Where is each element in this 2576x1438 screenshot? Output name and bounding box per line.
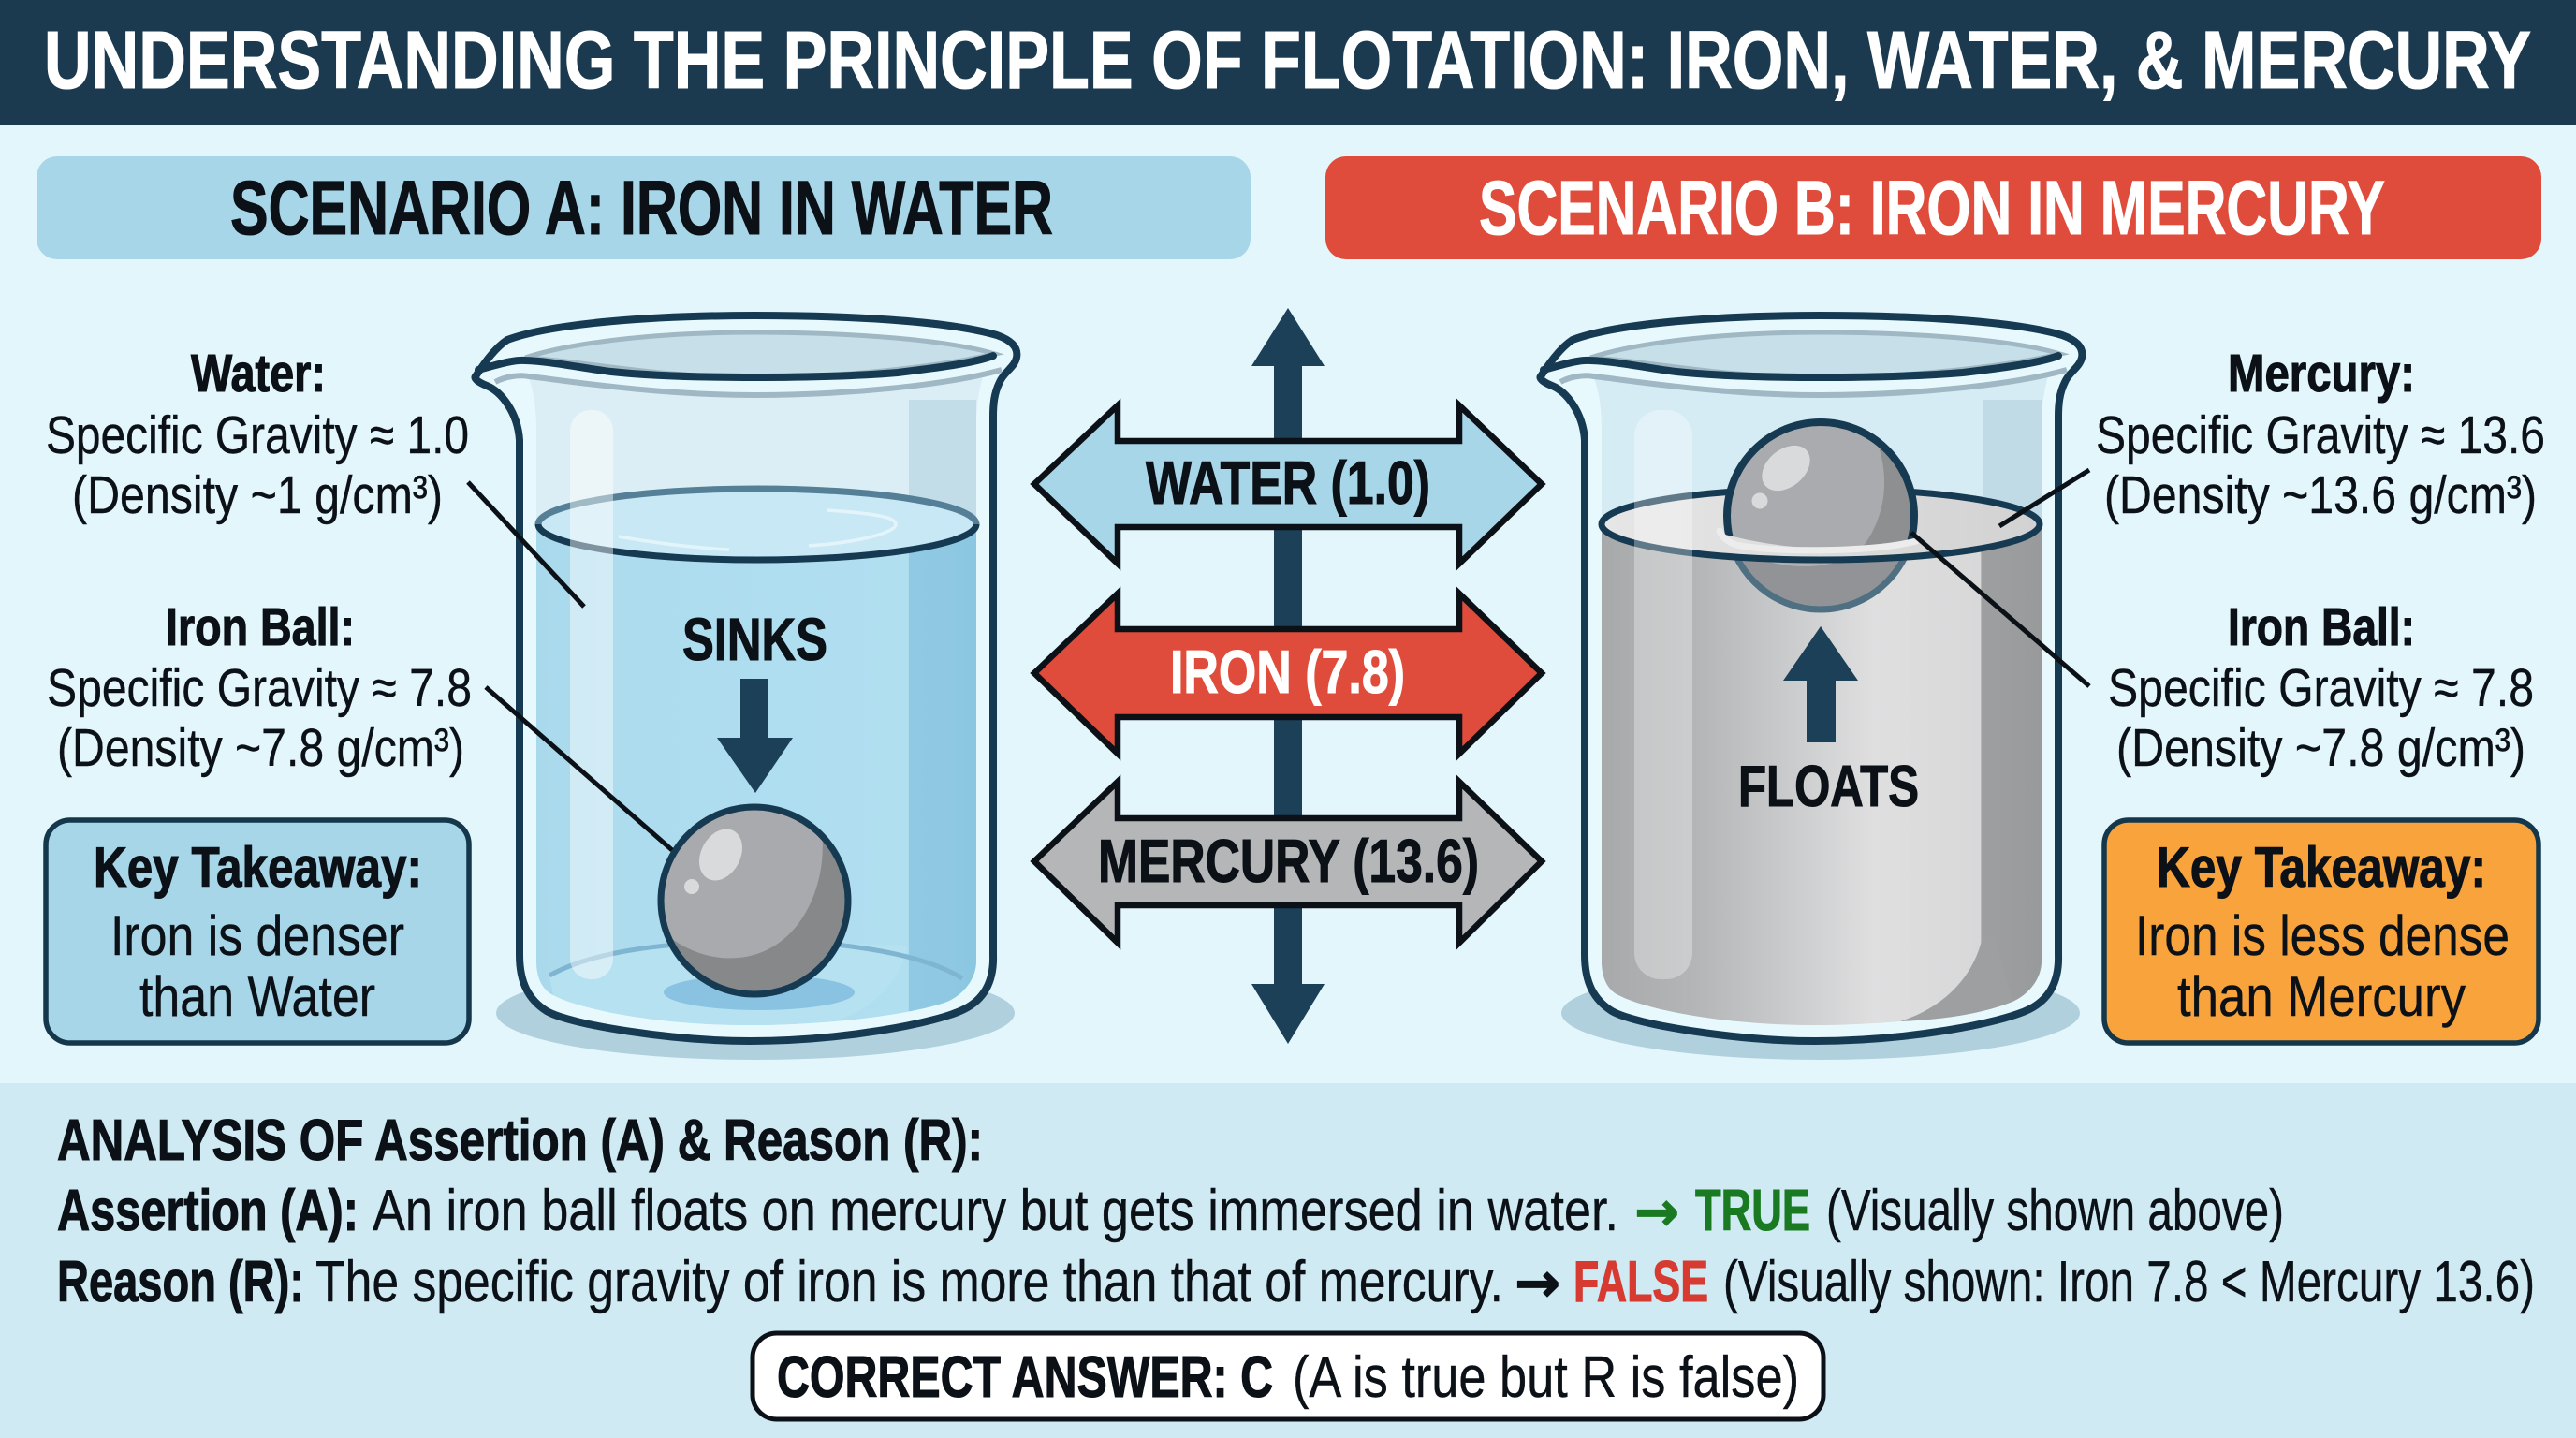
label: FLOATS: FLOATS [1738,755,1919,819]
callout: key takeaway A: than Water [139,965,375,1028]
glass highlight [570,410,613,979]
assertion line: (Visually shown above) [1826,1179,2284,1243]
callout: key takeaway B [2104,820,2539,1043]
correct answer box [753,1333,1823,1419]
iron ball [661,807,848,994]
mercury body [1602,524,2042,1025]
water surface [538,489,976,560]
text block: water properties: Water: [191,344,326,404]
glass body [476,315,1017,1041]
text block: iron ball properties A: Iron Ball: [166,597,355,657]
double arrow: water: WATER (1.0) [1146,448,1430,517]
meniscus [1720,531,1916,550]
arrow: up [1783,626,1858,742]
callout: key takeaway B: Iron is less dense [2135,904,2510,967]
beaker shadow [1561,966,2080,1060]
assertion line: Assertion (A): [57,1179,359,1243]
assertion line: → [1634,1180,1679,1243]
double arrow: water [1034,405,1542,564]
text block: iron ball properties A [47,597,472,778]
glass highlight [1634,410,1692,979]
leader: iron ball B [1911,533,2089,686]
callout: key takeaway B: Key Takeaway: [2157,836,2486,899]
reason line: → [1515,1251,1560,1314]
assertion line: An iron ball floats on mercury but gets immersed in water. [373,1179,1618,1243]
assertion line [57,1179,2284,1243]
callout: key takeaway A: Key Takeaway: [94,836,422,899]
leader: water [468,482,584,607]
rim interior [1590,332,2060,377]
text block: mercury properties: Mercury: [2228,344,2415,404]
beaker B with mercury and floating iron ball [1541,315,2082,1060]
beaker outline [476,315,1017,1041]
double arrow: mercury [1034,782,1542,943]
correct answer box: (A is true but R is false) [1293,1345,1799,1410]
beaker A with water and iron ball [476,315,1017,1060]
reason line: The specific gravity of iron is more than that of mercury. [315,1250,1503,1314]
text block: iron ball properties B: Iron Ball: [2228,597,2415,657]
beaker outline [1541,315,2082,1041]
callout: key takeaway A: Iron is denser [110,904,404,967]
double arrow: iron: IRON (7.8) [1170,638,1405,706]
callout: key takeaway A [46,820,469,1043]
mercury surface [1602,489,2040,560]
callout: key takeaway B: than Mercury [2177,965,2466,1028]
text block: iron ball properties A: (Density ~7.8 g/cm³) [57,718,464,778]
analysis heading: ANALYSIS OF Assertion (A) & Reason (R): [57,1108,983,1173]
double arrow: iron [1034,594,1542,754]
heading: scenario A: SCENARIO A: IRON IN WATER [230,166,1053,251]
vertical density axis [1251,308,1325,1044]
beaker floor [549,941,907,1025]
text block: mercury properties [2096,344,2545,525]
text block: iron ball properties A: Specific Gravity ≈ 7.8 [47,658,472,718]
reason line [57,1250,2535,1314]
glass body [1541,315,2082,1041]
rim interior [525,332,995,377]
exposed part of ball [1723,418,1918,547]
heading: scenario A [37,156,1251,259]
water body [536,524,976,1025]
assertion line: TRUE [1695,1179,1810,1243]
text block: water properties: (Density ~1 g/cm³) [72,465,443,525]
leader: iron ball A [486,687,672,850]
reason line: FALSE [1573,1250,1708,1314]
arrow: down [717,679,793,793]
submerged part of ball [1734,560,1907,612]
beaker shadow [496,966,1015,1060]
double arrow: mercury: MERCURY (13.6) [1098,827,1479,895]
text block: water properties [46,344,469,525]
text block: iron ball properties B [2108,597,2534,778]
leader: mercury [1999,470,2089,526]
text block: water properties: Specific Gravity ≈ 1.0 [46,405,469,465]
panel: analysis [0,1083,2576,1438]
reason line: Reason (R): [57,1250,304,1314]
correct answer box: CORRECT ANSWER: C [777,1345,1273,1410]
label: SINKS: SINKS [682,606,827,673]
